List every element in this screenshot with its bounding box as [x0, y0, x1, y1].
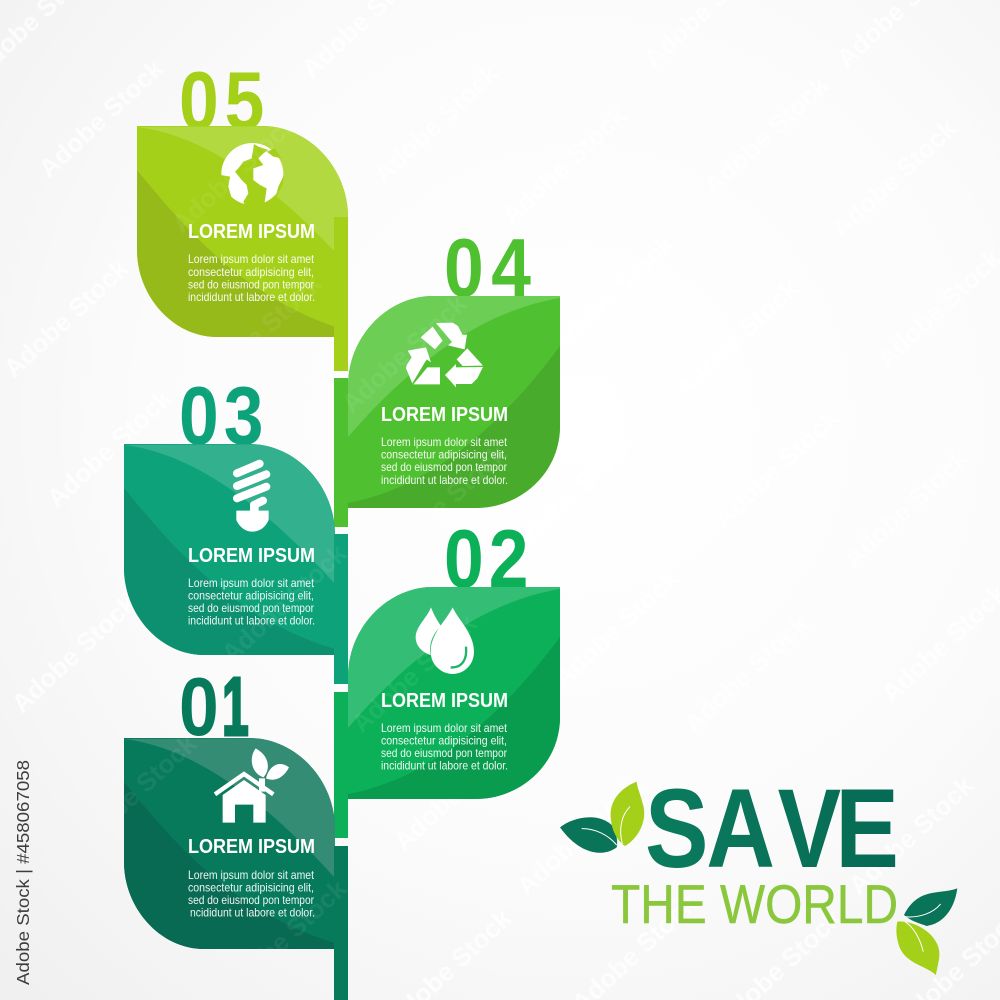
watermark on leaves: Adobe Stock — [191, 268, 328, 399]
number 01: 0 — [179, 661, 219, 753]
watermark on leaves: Adobe Stock — [216, 873, 353, 1000]
icon: title leaves top — [560, 782, 644, 853]
heading: LOREM IPSUM — [381, 403, 508, 426]
heading: LOREM IPSUM — [188, 544, 315, 567]
heading: LOREM IPSUM — [381, 689, 508, 712]
text block: sed do eiusmod pon tempor — [381, 746, 507, 760]
text block: Lorem ipsum dolor sit amet — [381, 721, 508, 735]
number 05: 05 — [179, 55, 264, 147]
text block: incididunt ut labore et dolor. — [381, 473, 508, 487]
text block — [381, 435, 508, 487]
text block: sed do eiusmod pon tempor — [188, 278, 314, 292]
watermark on leaves: Adobe Stock — [346, 608, 483, 739]
icon: recycle — [406, 323, 483, 387]
watermark on leaves: Adobe Stock — [166, 108, 303, 239]
watermark on leaves: Adobe Stock — [66, 728, 203, 859]
text block: consectetur adipisicing elit, — [188, 265, 314, 279]
number 03: 03 — [179, 370, 263, 462]
watermark on leaves — [66, 108, 513, 1000]
panel: leaf 05 — [137, 126, 348, 371]
panel: leaf 04 — [334, 296, 560, 527]
icon: globe — [221, 143, 284, 205]
panel: leaf 02 — [334, 587, 560, 838]
text block — [381, 721, 508, 772]
text block: consectetur adipisicing elit, — [381, 734, 507, 748]
icon: water drops — [416, 607, 474, 674]
heading: LOREM IPSUM — [188, 220, 315, 243]
text block: sed do eiusmod pon tempor — [381, 460, 507, 474]
watermark on leaves: Adobe Stock — [216, 538, 353, 669]
number 02: 02 — [444, 513, 528, 605]
title: SAVE: SAVE — [645, 767, 899, 892]
subtitle: THE WORLD: THE WORLD — [611, 873, 898, 935]
text block: sed do eiusmod pon tempor — [188, 893, 314, 907]
text block: Lorem ipsum dolor sit amet — [188, 252, 315, 266]
text block: ncididunt ut labore et dolor. — [190, 906, 315, 920]
text block: incididunt ut labore et dolor. — [188, 290, 315, 304]
panel: leaf 01 — [124, 738, 348, 1000]
icon: light bulb — [236, 464, 269, 532]
text block: incididunt ut labore et dolor. — [188, 614, 315, 628]
number 01 — [179, 661, 249, 753]
number 04: 04 — [444, 222, 531, 314]
number 01: 1 — [222, 662, 249, 753]
watermark on leaves: Adobe Stock — [376, 438, 513, 569]
icon: title leaves bottom — [896, 888, 957, 975]
text block — [188, 252, 315, 304]
text block: Lorem ipsum dolor sit amet — [381, 435, 508, 449]
icon: eco house — [215, 748, 289, 823]
text block: consectetur adipisicing elit, — [188, 588, 314, 602]
text block — [188, 868, 315, 920]
text block: consectetur adipisicing elit, — [381, 448, 507, 462]
text block: Lorem ipsum dolor sit amet — [188, 576, 315, 590]
text block: incididunt ut labore et dolor. — [381, 758, 508, 772]
text block: Lorem ipsum dolor sit amet — [188, 868, 315, 882]
text block: sed do eiusmod pon tempor — [188, 601, 314, 615]
watermark on leaves: Adobe Stock — [336, 288, 473, 419]
text block — [188, 576, 315, 628]
stock id label: Adobe Stock | #458067058 — [13, 760, 33, 985]
text block: consectetur adipisicing elit, — [188, 880, 314, 894]
panel: leaf 03 — [124, 444, 348, 684]
heading: LOREM IPSUM — [188, 835, 315, 858]
